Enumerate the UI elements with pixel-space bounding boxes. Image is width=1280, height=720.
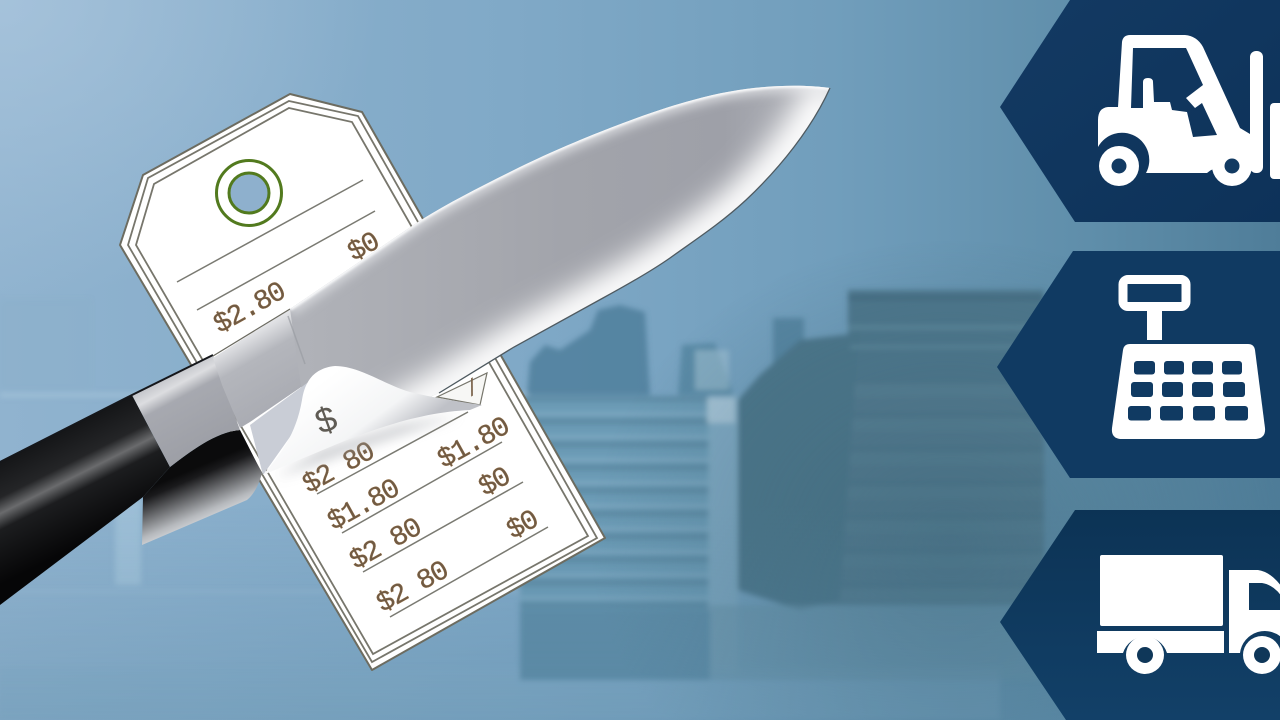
tag prices: $2 80 <box>298 437 380 501</box>
tag rule lines <box>177 180 548 617</box>
tag prices: $0 <box>474 462 516 504</box>
bolster <box>213 309 307 428</box>
blade <box>290 86 830 420</box>
icon: forklift <box>1098 35 1280 186</box>
curl dollar sign: $ <box>310 399 344 445</box>
lower blade piece <box>142 430 262 545</box>
handle <box>0 395 170 605</box>
tag prices <box>209 227 544 620</box>
tag prices: $1.80 <box>323 474 405 538</box>
bolster seam <box>288 316 305 364</box>
icon: cash register <box>1112 280 1265 439</box>
peeled tag corner <box>250 366 487 478</box>
chevron panel: cash register <box>997 251 1280 478</box>
tag prices: $1.80 <box>433 412 515 476</box>
peeled tag corner: / <box>461 375 485 403</box>
curl shadow <box>250 383 312 475</box>
knife <box>0 86 830 605</box>
small tag flap <box>437 373 487 405</box>
tag prices: $0 <box>502 505 544 547</box>
ferrule <box>132 355 240 467</box>
chevron panel: delivery truck <box>1000 510 1280 720</box>
tag prices: $2.80 <box>209 277 291 341</box>
chevron panel: forklift <box>1000 0 1280 222</box>
curl <box>263 366 482 475</box>
tag eyelet <box>216 160 282 226</box>
tag prices: $2 80 <box>372 556 454 620</box>
icon: delivery truck <box>1097 555 1280 674</box>
soft shadow on tag <box>275 415 460 478</box>
tag prices: $0 <box>343 227 385 269</box>
tag prices: $2 80 <box>345 513 427 577</box>
price tag <box>120 94 605 670</box>
